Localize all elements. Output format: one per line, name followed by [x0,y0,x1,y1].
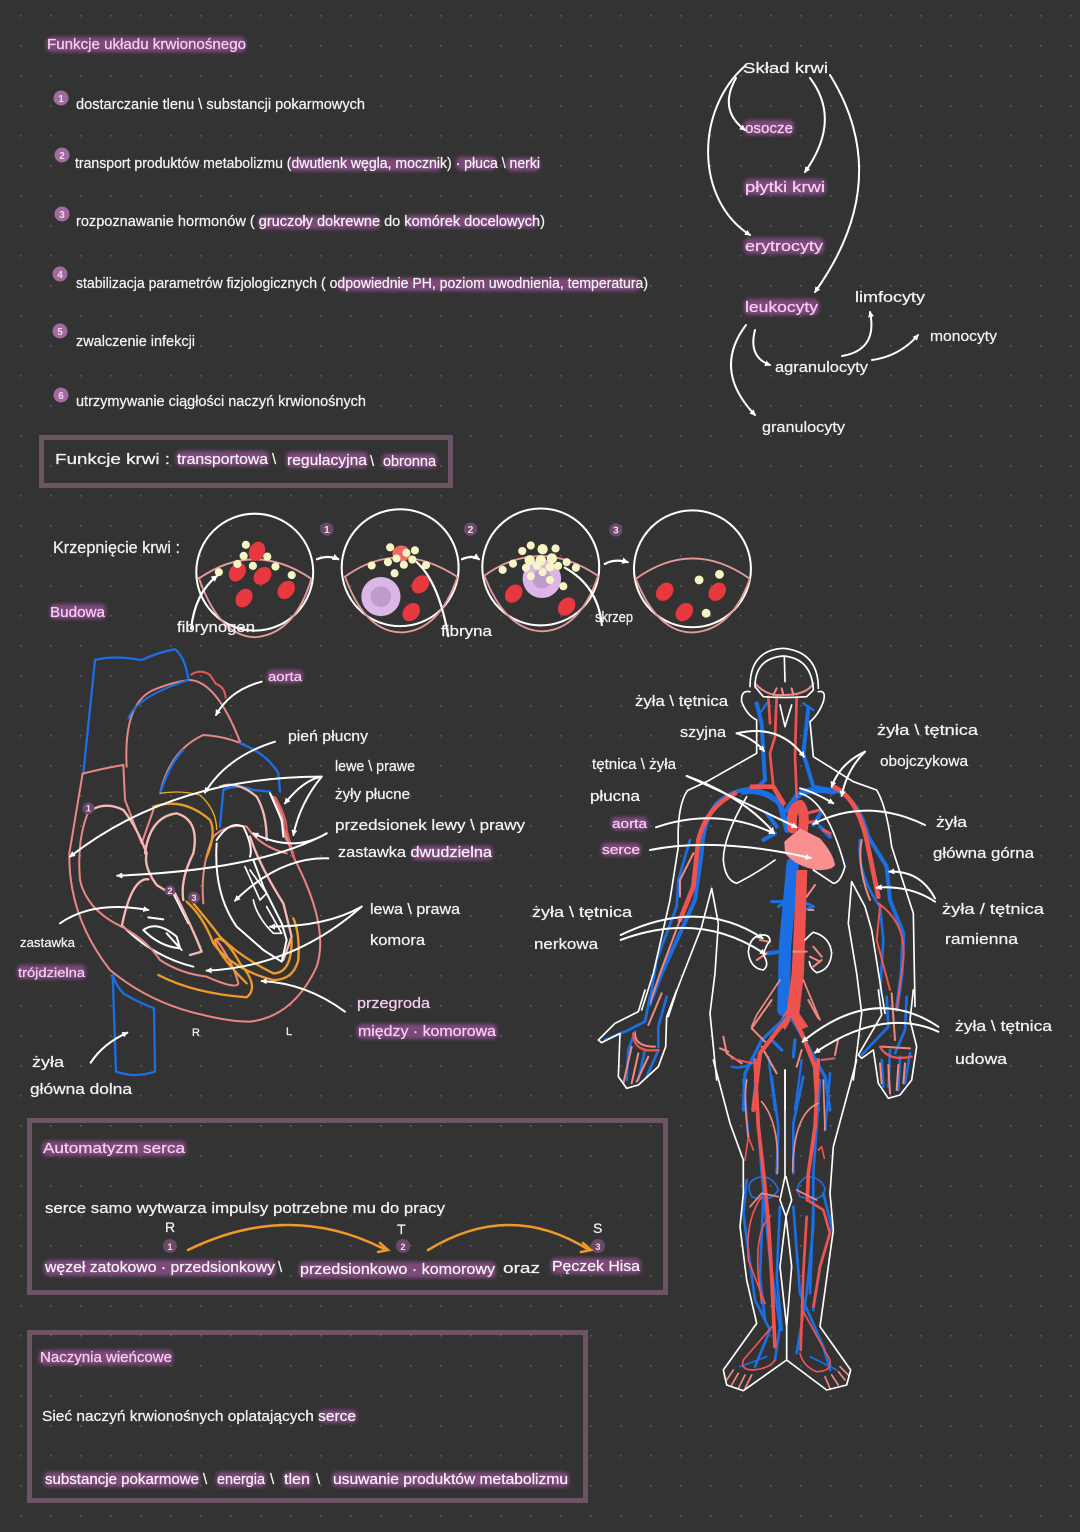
label: lewe prawe: lewe \ prawe [335,758,415,775]
step badges [320,523,623,537]
lower body [713,1060,857,1391]
pathway text: oraz [503,1260,540,1277]
body outline upper [642,648,915,1080]
label: granulocyty: granulocyty [762,419,846,436]
stage 3 circle [482,508,599,631]
item 2: 2 [59,151,65,162]
label: żyła tętnica nerkowa: nerkowa [534,936,599,953]
label: żyła tętnica udowa: udowa [955,1051,1008,1068]
panel: funkcje krwi: \ [272,451,277,468]
functions text: usuwanie produktów metabolizmu [333,1471,568,1488]
label: żyła tętnica udowa: żyła \ tętnica [955,1018,1053,1035]
pathway text: \ [278,1259,283,1276]
item 3 [54,206,545,230]
item 1 [54,90,365,113]
label: żyła tętnica ramienna: ramienna [945,931,1019,948]
label: żyła tętnica szyjna: szyjna [680,724,727,741]
diagram: blood clotting stages [191,508,751,637]
tree arrows [708,66,918,415]
upper veins [650,703,903,1010]
diagram: human circulatory system [598,648,938,1391]
functions text [44,1471,569,1488]
label: przegroda międzykomorowa: między · komorowa [358,1023,497,1040]
vena cava superior [83,649,188,773]
label: żyły płucne: żyły płucne [335,786,410,803]
description: serce samo wytwarza impulsy potrzebne mu do pracy [45,1200,446,1217]
left ventricle [216,825,287,962]
node badges: 1 [167,1242,173,1252]
label: skrzep: skrzep [595,609,633,626]
item 3: rozpoznawanie hormonów ( gruczoły dokrewne do komórek docelowych) [76,213,545,230]
right ventricle [122,890,238,986]
label: żyła główna dolna [30,1054,133,1098]
item 5: zwalczenie infekcji [76,333,195,350]
label: żyła główna dolna: żyła [32,1054,65,1071]
list of functions [52,90,648,410]
pointer arrows upper [621,731,938,1053]
node badges [163,1239,605,1253]
heart pointer arrows [60,682,362,1063]
label: żyła główna górna: główna górna [933,845,1035,862]
label: zastawka trójdzielna [17,935,86,980]
label: serce: serce [602,842,640,857]
left hand [598,990,677,1088]
functions text: \ [270,1471,275,1488]
label: limfocyty: limfocyty [855,289,926,306]
title: funkcje układu krwionośnego: Funkcje układu krwionośnego [47,36,246,53]
hands and pelvis [598,990,917,1110]
item 5 [52,324,195,350]
midline [782,1070,787,1110]
panel: funkcje krwi: \ [370,453,375,470]
left atrium and walls [145,785,295,960]
item 4: 4 [57,270,63,281]
label: leukocyty: leukocyty [745,299,819,316]
item 3: 3 [59,210,65,221]
label: żyła tętnica szyjna [635,693,729,741]
node badges: 2 [400,1242,406,1252]
label: zastawka trójdzielna: zastawka [20,935,76,950]
heart step badges [82,802,200,904]
label: żyła tętnica obojczykowa [877,722,979,770]
node letters: R [165,1219,175,1235]
upper arteries [650,683,904,1030]
pathway text: węzeł zatokowo · przedsionkowy [44,1259,276,1276]
label: skład krwi: Skład krwi [743,60,828,77]
item 6: 6 [58,391,64,402]
label: żyła tętnica ramienna [942,901,1045,948]
inferior vena cava [113,975,155,1075]
panel: automatyzm serca [30,1120,666,1292]
item 1: 1 [58,94,64,105]
label: żyła tętnica nerkowa [532,904,633,953]
pelvic vessels [720,1000,838,1110]
label: żyła tętnica obojczykowa: żyła \ tętnica [877,722,979,739]
step badges: 3 [613,526,619,537]
description: Sieć naczyń krwionośnych oplatających serce [42,1408,356,1425]
panel: funkcje krwi: obronna [383,453,437,470]
panel: funkcje krwi: transportowa [177,451,269,468]
node badges: 3 [595,1242,601,1252]
label: zastawka trójdzielna: trójdzielna [18,965,86,980]
heart organ [784,828,835,870]
panel: funkcje krwi: regulacyjna [287,452,368,469]
heart step badges: 2 [167,886,173,896]
stage 4 circle [634,510,751,632]
node letters [165,1219,602,1237]
panel: funkcje krwi [42,438,450,486]
heart labels [17,669,526,1098]
heart step badges: 1 [86,804,91,814]
composition of blood tree [708,60,998,436]
label: osocze: osocze [745,120,793,137]
pathway text: przedsionkowo · komorowy [300,1261,496,1278]
label: erytrocyty: erytrocyty [745,238,824,255]
label: R: R [192,1027,200,1039]
label: żyła tętnica ramienna: żyła / tętnica [942,901,1045,918]
label: agranulocyty: agranulocyty [775,359,869,376]
lower body outline [713,1060,857,1391]
label: żyła główna dolna: główna dolna [30,1081,133,1098]
stage 1 circle [196,514,313,637]
label: przegroda międzykomorowa [357,995,497,1040]
label: tętnica żyła płucna: płucna [590,788,641,805]
label: aorta: aorta [612,816,648,831]
label: zastawka dwudzielna: zastawka dwudzielna [338,844,493,861]
item 5: 5 [57,327,63,338]
right hand [858,990,917,1098]
label: fibryna: fibryna [441,623,493,640]
pulmonary trunk [160,735,280,830]
functions text: tlen [284,1471,310,1488]
step badges: 1 [324,525,330,536]
heading: Naczynia wieńcowe [40,1349,172,1366]
outer heart wall [69,773,320,1022]
heart step badges: 3 [191,893,197,903]
septum orange [153,804,299,997]
aorta [84,672,240,843]
label: aorta: aorta [268,669,303,684]
functions text: energia [217,1471,266,1488]
item 6: utrzymywanie ciągłości naczyń krwionośnych [76,393,366,410]
label: płytki krwi: płytki krwi [745,179,825,196]
item 2: transport produktów metabolizmu (dwutlenk węgla, mocznik) · płuca \ nerki [75,155,540,172]
step badges: 2 [468,525,474,536]
pathway text [44,1258,641,1278]
label: pień płucny: pień płucny [288,728,369,745]
label: tętnica żyła płucna: tętnica \ żyła [592,756,677,773]
lower arteries and veins [727,1060,848,1388]
item 1: dostarczanie tlenu \ substancji pokarmowych [76,96,365,113]
label: żyła główna górna: żyła [936,814,968,831]
label: L: L [286,1026,292,1038]
label: lewa prawa komora: lewa \ prawa [370,901,461,918]
diagram: heart cross-section [60,649,362,1075]
item 6 [54,388,366,410]
functions text: substancje pokarmowe [45,1471,199,1488]
label: przedsionek: przedsionek lewy \ prawy [335,817,526,834]
functions text: \ [316,1471,321,1488]
label: lewa prawa komora [370,901,461,949]
step arrows [191,557,628,636]
orange arrows [188,1225,591,1252]
heading: Automatyzm serca [43,1140,186,1157]
item 4: stabilizacja parametrów fizjologicznych ( odpowiednie PH, poziom uwodnienia, temperatura) [76,275,648,292]
label: fibrynogen: fibrynogen [177,619,255,636]
label: monocyty: monocyty [930,328,998,345]
pathway text: Pęczek Hisa [552,1258,641,1275]
panel: funkcje krwi: Funkcje krwi : [55,451,170,468]
stage 2 circle [342,509,459,632]
upper body [642,648,915,1080]
node letters: T [397,1221,406,1237]
body labels [532,693,1053,1068]
item 2 [54,148,540,172]
panel: naczynia wieńcowe [30,1332,586,1500]
label: przegroda międzykomorowa: przegroda [357,995,431,1012]
functions text: \ [203,1471,208,1488]
label: żyła tętnica udowa [955,1018,1053,1068]
label: żyła tętnica obojczykowa: obojczykowa [880,753,969,770]
label: żyła tętnica nerkowa: żyła \ tętnica [532,904,633,921]
item 4 [52,266,648,292]
label: żyła główna górna [933,814,1035,862]
label: tętnica żyła płucna [590,756,677,805]
label: żyła tętnica szyjna: żyła \ tętnica [635,693,729,710]
node letters: S [593,1220,602,1236]
heading: budowa: Budowa [50,604,106,621]
right atrium [79,806,170,927]
label: lewa prawa komora: komora [370,932,426,949]
heading: krzepnięcie krwi: Krzepnięcie krwi : [53,538,180,557]
